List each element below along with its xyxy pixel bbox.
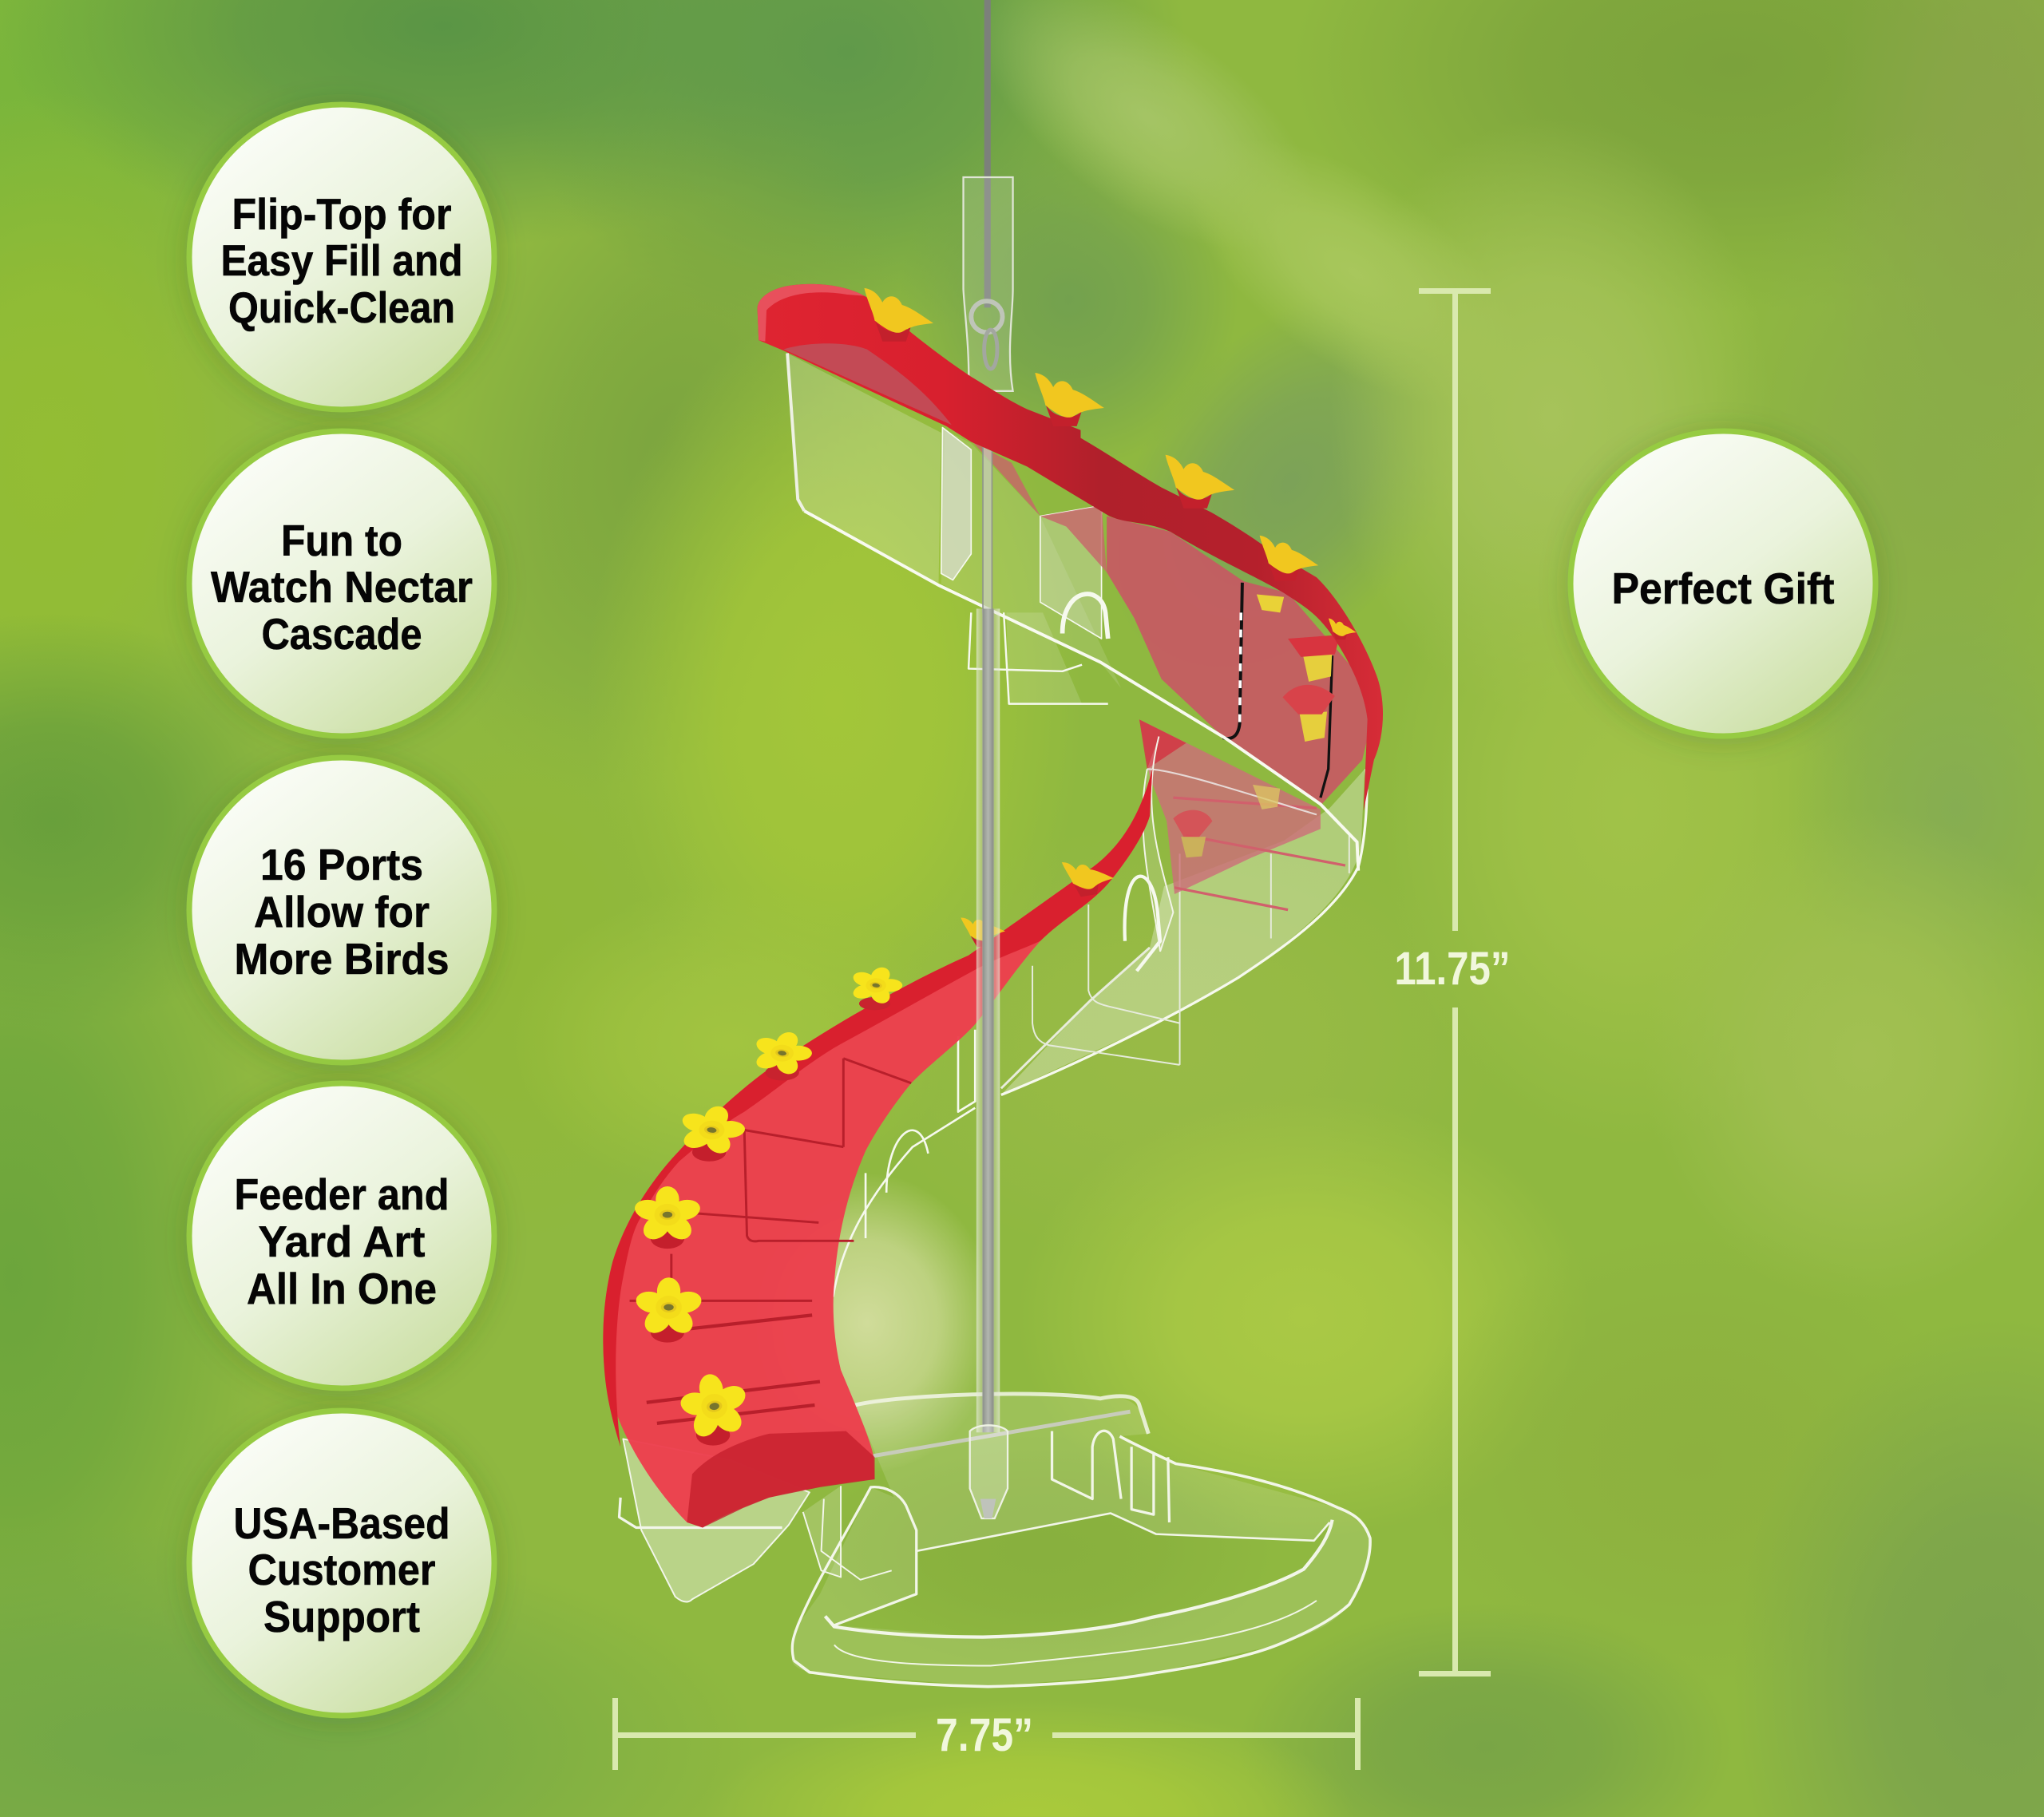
translucent pink back wall [787, 353, 1370, 952]
feature circle: 16 ports: More Birds [235, 934, 449, 984]
feature circle: 16 ports [184, 755, 500, 1071]
feature circle: perfect gift [1565, 429, 1881, 745]
clear upper spiral walls [787, 353, 1367, 1296]
feature circle: 16 ports: Allow for [254, 887, 430, 936]
feature circle: flip-top: Flip-Top for [232, 189, 452, 239]
red lid: top spiral band [758, 284, 1383, 811]
pole [970, 608, 1008, 1518]
feature circle: nectar cascade: Fun to [281, 516, 402, 565]
red lid: lower spiral band [603, 769, 1152, 1527]
feature circle: feeder and yard art: Feeder and [235, 1170, 449, 1219]
feature circle: customer support: Support [263, 1592, 420, 1641]
feature circle: customer support: USA-Based [233, 1498, 450, 1548]
yellow side ports seen through wall [1173, 594, 1340, 857]
feature circle: nectar cascade: Watch Nectar [211, 562, 473, 612]
feature circle: feeder and yard art: Yard Art [259, 1217, 425, 1266]
feature circle: flip-top: Easy Fill and [220, 236, 463, 285]
feature circle: nectar cascade: Cascade [262, 609, 422, 659]
feature circle: customer support: Customer [248, 1545, 436, 1594]
feature circle: flip-top: Quick-Clean [228, 283, 455, 332]
feature circle: perfect gift: Perfect Gift [1611, 564, 1835, 613]
feature circle: nectar cascade [184, 429, 500, 745]
yellow flower ports [632, 288, 1357, 1446]
feature circle: feeder and yard art: All In One [247, 1264, 437, 1313]
hanging rod and tube [964, 0, 1013, 612]
feeder base tray [792, 1393, 1370, 1687]
feature circle: customer support [184, 1408, 500, 1724]
feature circle: flip-top [184, 102, 500, 418]
feeder product illustration [603, 0, 1383, 1687]
height dimension line [1394, 288, 1511, 1676]
feature circle: 16 ports: 16 Ports [260, 840, 423, 889]
height dimension line: 11.75” [1394, 943, 1511, 995]
feature circle: feeder and yard art [184, 1081, 500, 1397]
width dimension line: 7.75” [936, 1709, 1033, 1761]
width dimension line [612, 1698, 1361, 1770]
clear lower reservoir behind red band [620, 1439, 841, 1602]
